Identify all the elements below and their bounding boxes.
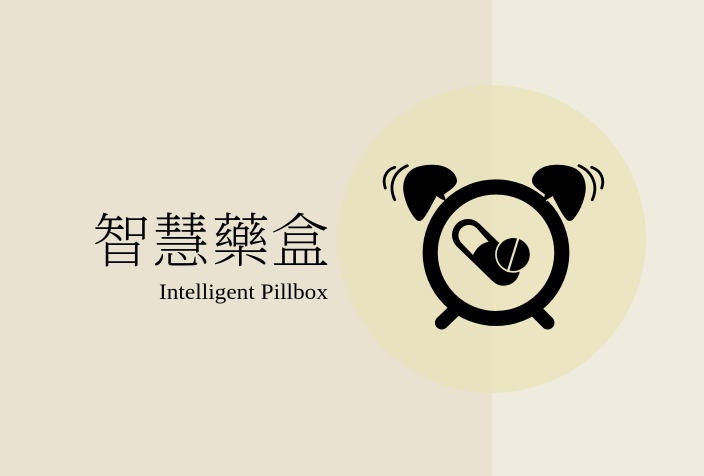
title: 智慧藥盒: [92, 209, 330, 275]
panel: right background: [492, 0, 704, 476]
capsule: [458, 225, 504, 270]
left vibration lines: [384, 166, 407, 200]
tablet: [495, 236, 532, 273]
bell joint ticks: [436, 196, 553, 201]
clock legs: [442, 309, 548, 323]
clock ring: [430, 187, 562, 318]
panel: left background: [0, 0, 492, 476]
left bell: [403, 165, 457, 221]
right vibration lines: [579, 166, 603, 200]
right bell: [532, 165, 586, 221]
icon: alarm clock with pill: [384, 165, 603, 323]
background circle: [338, 85, 646, 393]
subtitle: Intelligent Pillbox: [159, 279, 328, 304]
